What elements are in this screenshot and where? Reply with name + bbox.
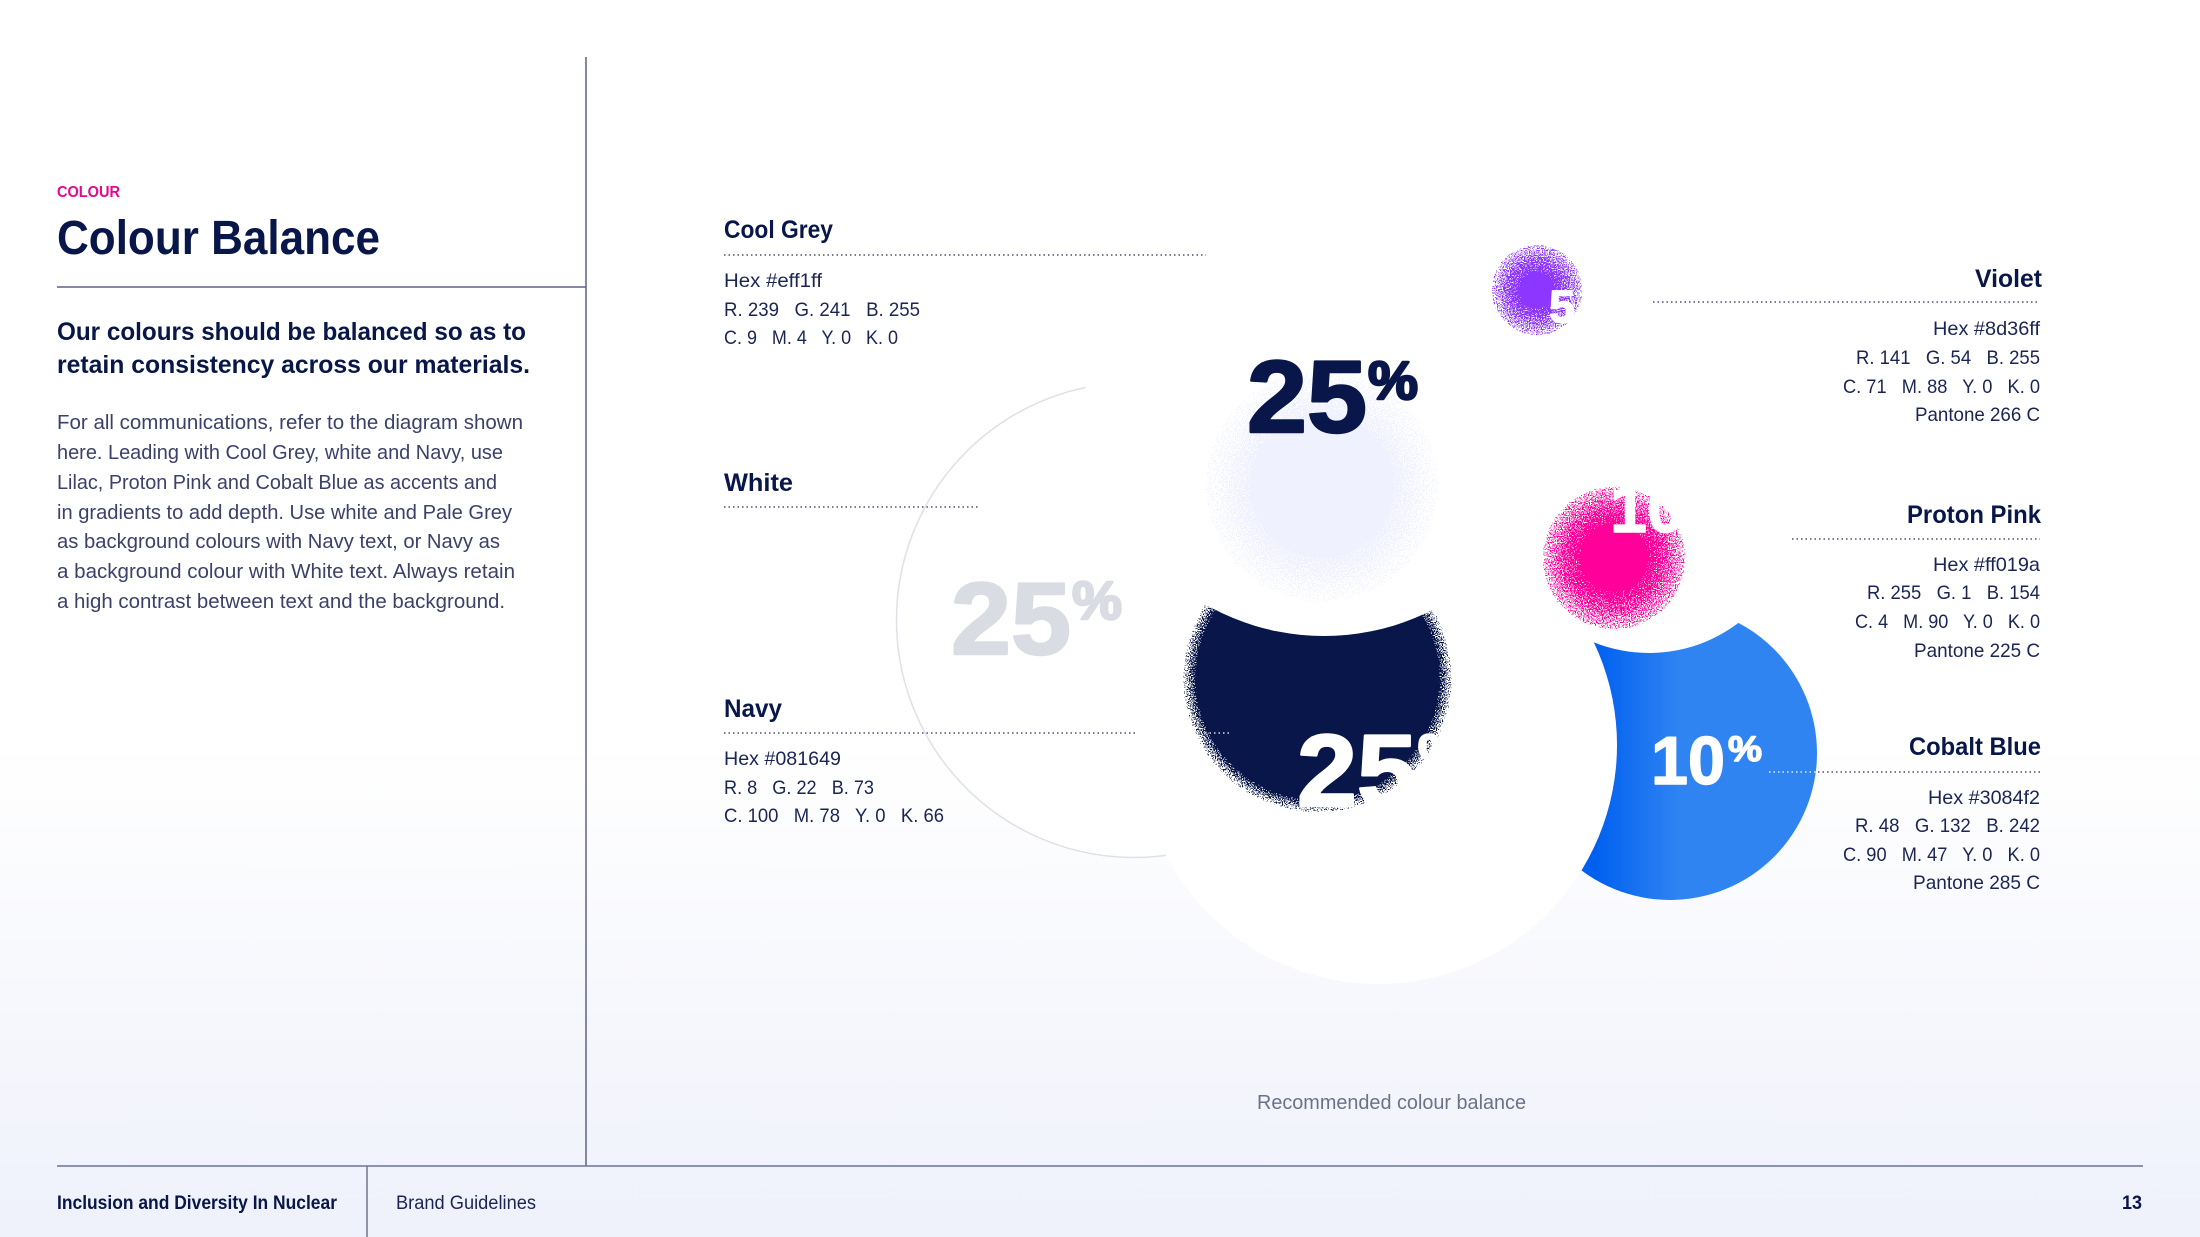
left column vertical rule — [585, 57, 587, 1166]
label: violet: Pantone 266 C — [1915, 404, 2040, 426]
label: violet: Violet — [1975, 265, 2043, 293]
label: cobalt blue — [1769, 733, 2041, 894]
cool grey share figure: % — [1368, 351, 1418, 411]
lead statement: Our colours should be balanced so as to — [57, 318, 526, 346]
pink share figure — [1610, 471, 1721, 547]
diagram caption: Recommended colour balance — [1257, 1091, 1526, 1114]
navy dithered circle — [1184, 544, 1452, 812]
body paragraph: For all communications, refer to the diagram shown — [57, 411, 523, 434]
label: white: White — [724, 469, 793, 497]
cobalt share figure: % — [1728, 730, 1762, 769]
white share figure — [951, 562, 1122, 676]
violet share figure: 5 — [1549, 281, 1575, 332]
pink share figure: 10 — [1610, 471, 1684, 547]
label: proton pink: C. 4 M. 90 Y. 0 K. 0 — [1855, 611, 2040, 633]
label: navy: C. 100 M. 78 Y. 0 K. 66 — [724, 805, 944, 827]
body paragraph — [57, 411, 523, 613]
label: cool grey: R. 239 G. 241 B. 255 — [724, 299, 920, 321]
title rule — [57, 286, 586, 288]
label: violet: Hex #8d36ff — [1933, 318, 2041, 340]
label: proton pink: Proton Pink — [1907, 501, 2041, 529]
proton pink dithered circle — [1543, 487, 1685, 629]
header block — [57, 184, 380, 265]
label: cool grey: C. 9 M. 4 Y. 0 K. 0 — [724, 327, 898, 349]
label: violet — [1653, 265, 2043, 426]
cobalt share figure — [1651, 723, 1762, 799]
diagram: colour balance circles — [896, 158, 1817, 984]
label: navy — [724, 695, 1232, 827]
footer guide name: Brand Guidelines — [396, 1193, 536, 1214]
cool grey share figure: 25 — [1247, 340, 1367, 454]
label: cobalt blue: R. 48 G. 132 B. 242 — [1855, 815, 2040, 837]
white circle outline — [896, 382, 1372, 858]
label: cobalt blue: Cobalt Blue — [1909, 733, 2041, 761]
white share figure: 25 — [951, 562, 1071, 676]
navy share figure: % — [1418, 724, 1468, 784]
label: proton pink — [1792, 501, 2041, 662]
page number: 13 — [2122, 1193, 2142, 1214]
label: cobalt blue: Pantone 285 C — [1913, 872, 2040, 894]
label: cool grey: Hex #eff1ff — [724, 270, 823, 292]
white share figure: % — [1072, 571, 1122, 631]
cool grey share figure — [1247, 340, 1418, 454]
label: navy: R. 8 G. 22 B. 73 — [724, 777, 874, 799]
navy share figure: 25 — [1297, 714, 1417, 828]
label: cobalt blue: Hex #3084f2 — [1928, 787, 2040, 809]
body paragraph: in gradients to add depth. Use white and Pale Grey — [57, 501, 513, 524]
label: cool grey: Cool Grey — [724, 216, 833, 244]
proton pink backing circle — [1501, 357, 1797, 653]
body paragraph: a background colour with White text. Always retain — [57, 560, 515, 583]
label: cool grey — [724, 216, 1206, 349]
violet dithered circle — [1492, 245, 1582, 335]
label: proton pink: Hex #ff019a — [1933, 554, 2040, 576]
body paragraph: Lilac, Proton Pink and Cobalt Blue as accents and — [57, 471, 497, 494]
cobalt share figure: 10 — [1651, 723, 1725, 799]
title: Colour Balance — [57, 212, 380, 265]
cool grey backing circle — [1085, 158, 1563, 636]
white mask circle over cobalt and outline — [1139, 506, 1617, 984]
label: violet: R. 141 G. 54 B. 255 — [1856, 347, 2040, 369]
label: proton pink: R. 255 G. 1 B. 154 — [1867, 582, 2040, 604]
cool grey dithered circle — [1206, 370, 1438, 602]
lead statement — [57, 318, 530, 379]
body paragraph: a high contrast between text and the background. — [57, 590, 505, 613]
footer — [57, 1166, 2143, 1237]
navy share figure — [1297, 714, 1468, 828]
lead statement: retain consistency across our materials. — [57, 351, 530, 379]
label: navy: Navy — [724, 695, 782, 723]
label: proton pink: Pantone 225 C — [1914, 640, 2040, 662]
section label: COLOUR — [57, 184, 120, 201]
footer document name: Inclusion and Diversity In Nuclear — [57, 1193, 338, 1214]
body paragraph: here. Leading with Cool Grey, white and Navy, use — [57, 441, 503, 464]
label: cobalt blue: C. 90 M. 47 Y. 0 K. 0 — [1843, 844, 2040, 866]
pink share figure: % — [1687, 478, 1721, 517]
body paragraph: as background colours with Navy text, or Navy as — [57, 530, 500, 553]
cobalt blue circle — [1523, 606, 1817, 900]
label: violet: C. 71 M. 88 Y. 0 K. 0 — [1843, 376, 2040, 398]
label: navy: Hex #081649 — [724, 748, 841, 770]
